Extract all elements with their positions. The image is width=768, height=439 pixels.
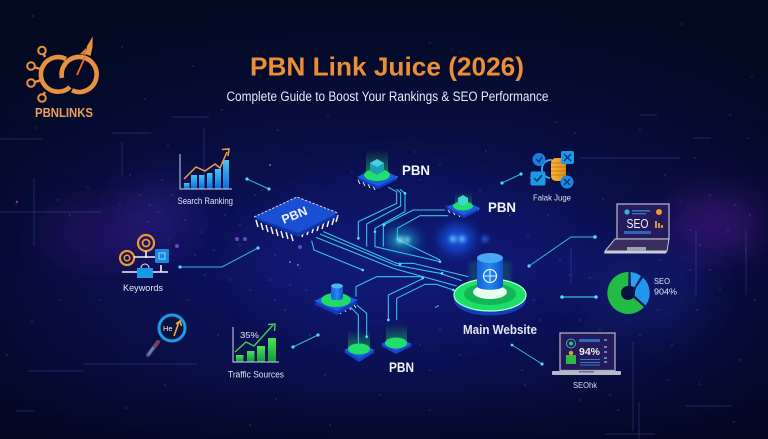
chip: large PBN	[254, 197, 338, 241]
icon: magnifier	[148, 315, 185, 355]
chart: Search Ranking	[178, 149, 233, 206]
subtitle: Complete Guide to Boost Your Rankings & SEO Performance	[226, 89, 548, 104]
screen value: 94%	[579, 346, 601, 358]
label: bottom PBN: PBN	[389, 360, 414, 375]
chip label: PBN	[280, 204, 309, 227]
pad: bottom PBN right	[381, 324, 412, 354]
label: Keywords	[123, 283, 163, 294]
laptop: 94% dashboard	[552, 333, 621, 390]
label: Traffic Sources	[228, 370, 284, 380]
main website platform	[454, 253, 537, 337]
label: Main Website	[463, 322, 537, 337]
donut label: SEO	[654, 277, 670, 286]
logo: PBNLINKS	[27, 36, 97, 120]
chip: right PBN	[446, 192, 516, 218]
chip label: PBN	[402, 162, 430, 178]
pad: bottom PBN left	[344, 330, 375, 362]
laptop: SEO	[604, 204, 669, 254]
glow nodes	[386, 225, 488, 253]
chart: SEO donut: 904%	[654, 286, 677, 296]
label: Search Ranking	[178, 196, 233, 206]
network diagram: circuit traces	[312, 187, 468, 343]
connector arrows	[178, 172, 598, 366]
chart: Traffic Sources	[228, 324, 284, 380]
chart: Traffic Sources: 35%	[240, 330, 259, 340]
icon: magnifier: He	[163, 324, 173, 333]
logo wordmark: PBNLINKS	[35, 106, 93, 120]
label: SEOhk	[573, 381, 598, 390]
trend arrow	[235, 324, 275, 352]
screen text: SEO	[626, 216, 648, 231]
icon: chain rings and rocket	[27, 36, 97, 102]
label: Falak Juge	[533, 192, 571, 202]
chart: SEO donut	[607, 272, 677, 314]
icon: Falak Juge coins	[530, 151, 574, 202]
chip label: PBN	[488, 199, 516, 215]
chip: top PBN	[357, 150, 430, 190]
icon: Keywords	[120, 235, 169, 294]
trend arrow	[184, 149, 229, 179]
database cylinder	[477, 259, 503, 290]
title: PBN Link Juice (2026)	[250, 52, 524, 82]
chip: lower left database	[314, 284, 358, 315]
